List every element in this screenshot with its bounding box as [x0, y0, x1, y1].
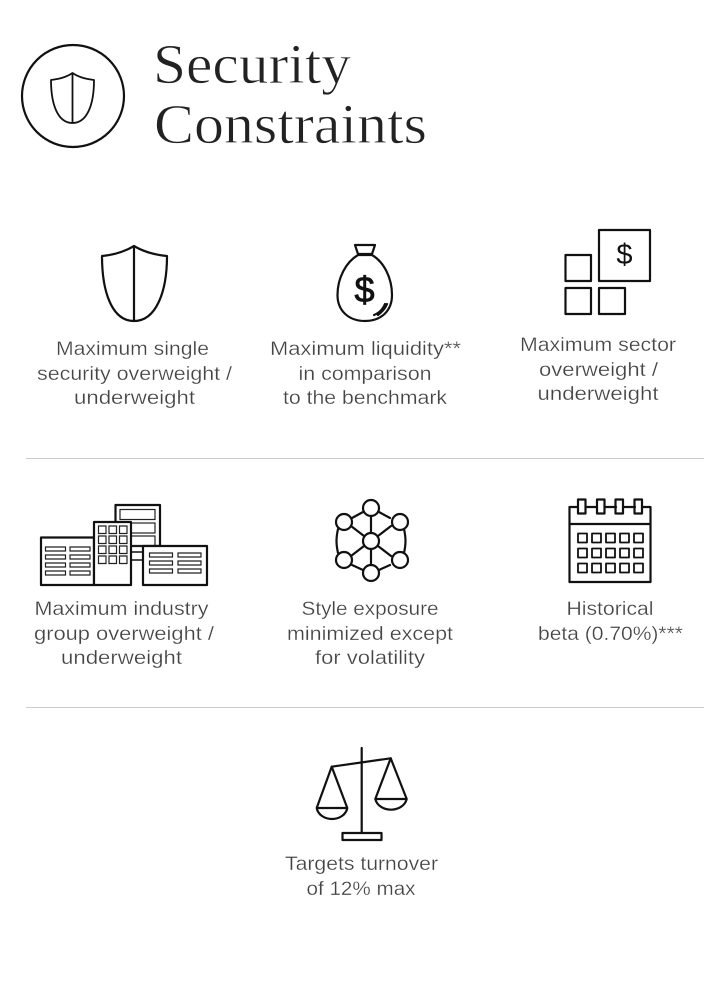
item: historical beta — [538, 500, 683, 645]
title: Security — [153, 34, 351, 96]
label: liquidity: in comparison — [298, 363, 432, 385]
icon: balance scale — [317, 748, 407, 840]
label: sector — [520, 334, 677, 405]
label: single security: security overweight / — [37, 363, 233, 385]
item: style exposure — [287, 500, 454, 669]
label: liquidity: Maximum liquidity** — [270, 338, 461, 360]
divider — [26, 458, 704, 460]
label: liquidity — [270, 338, 461, 409]
label: industry group: group overweight / — [34, 623, 215, 645]
label: sector: underweight — [538, 383, 659, 405]
label: style exposure: for volatility — [315, 647, 425, 669]
label: turnover: of 12% max — [306, 878, 416, 900]
item: industry group — [34, 505, 215, 669]
icon: money bag: $ — [354, 269, 375, 310]
label: single security: Maximum single — [56, 338, 209, 360]
icon: calendar — [570, 500, 650, 582]
label: style exposure: minimized except — [287, 623, 454, 645]
label: industry group — [34, 598, 215, 669]
icon: network — [336, 500, 408, 581]
icon: money bag — [338, 245, 392, 321]
label: sector: Maximum sector — [520, 334, 677, 356]
label: single security: underweight — [74, 387, 196, 409]
label: industry group: Maximum industry — [34, 598, 209, 620]
label: historical beta — [538, 598, 683, 645]
title — [153, 34, 427, 156]
label: style exposure: Style exposure — [302, 598, 438, 620]
item: liquidity — [270, 245, 461, 409]
divider — [26, 706, 704, 708]
icon: shield — [102, 246, 167, 321]
label: turnover — [285, 853, 439, 900]
item: single security — [37, 246, 233, 409]
label: liquidity: to the benchmark — [283, 387, 447, 409]
label: historical beta: Historical — [566, 598, 654, 620]
label: sector: overweight / — [539, 359, 659, 381]
label: single security — [37, 338, 233, 409]
header icon: shield in circle — [22, 45, 124, 147]
label: style exposure — [287, 598, 454, 669]
title: Constraints — [154, 94, 427, 156]
label: turnover: Targets turnover — [285, 853, 439, 875]
item: turnover — [285, 748, 439, 900]
label: historical beta: beta (0.70%)*** — [538, 623, 683, 645]
icon: squares with dollar: $ — [616, 239, 633, 271]
label: industry group: underweight — [61, 647, 183, 669]
item: sector — [520, 230, 677, 405]
icon: buildings — [41, 505, 207, 585]
icon: squares with dollar — [566, 230, 650, 314]
